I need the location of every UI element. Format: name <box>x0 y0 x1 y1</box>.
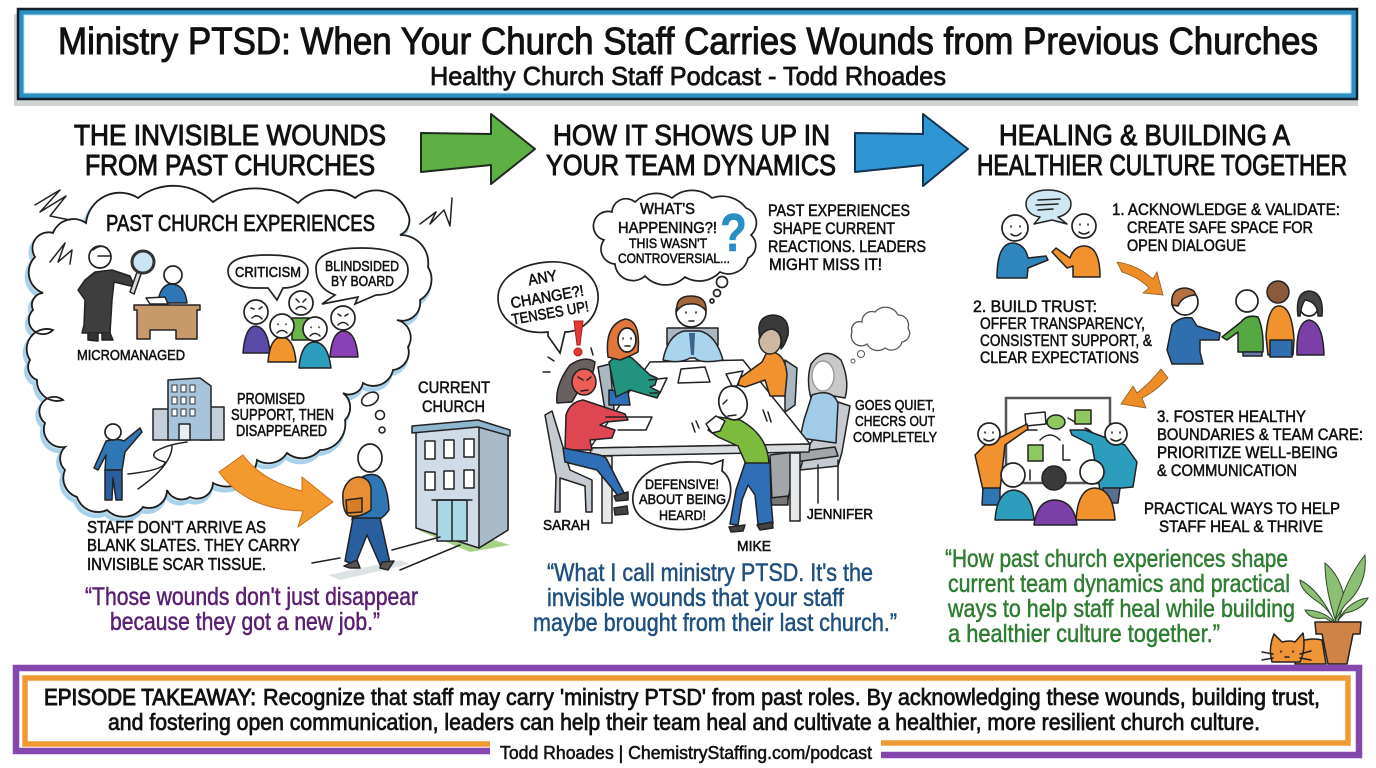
speech bubble: any change <box>498 262 598 353</box>
arrow: blue <box>855 114 968 186</box>
label: goes quiet: GOES QUIET, <box>855 398 935 414</box>
title banner <box>14 9 1358 106</box>
label: promised support: DISAPPEARED <box>236 423 327 440</box>
text block: practical ways: PRACTICAL WAYS TO HELP <box>1144 499 1340 518</box>
text block: past experiences: PAST EXPERIENCES <box>768 202 910 220</box>
heading: team dynamics <box>546 120 836 182</box>
heading: team dynamics: HOW IT SHOWS UP IN <box>553 120 830 152</box>
quote: blue: “What I call ministry PTSD. It's the <box>547 559 873 587</box>
label: goes quiet: COMPLETELY <box>853 430 937 446</box>
panel: episode takeaway: Recognize that staff may carry 'ministry PTSD' from past roles. By acknowledging these wounds, building trust, <box>263 684 1320 710</box>
subtitle: Healthy Church Staff Podcast - Todd Rhoades <box>430 61 946 91</box>
icon: red exclamation <box>574 321 583 356</box>
panel: past church experiences cloud <box>25 186 452 521</box>
text block: practical ways <box>1144 499 1340 536</box>
label: jennifer: JENNIFER <box>807 507 873 523</box>
icon: office building <box>128 378 224 489</box>
panel: episode takeaway <box>16 668 1359 763</box>
heading: invisible wounds <box>74 120 386 182</box>
icon: orange cat <box>1262 633 1326 664</box>
arrow: orange to current church <box>219 455 333 527</box>
question mark: ? <box>720 203 747 263</box>
heading: invisible wounds: THE INVISIBLE WOUNDS <box>74 120 386 152</box>
icon: priest micromanaging with magnifier <box>78 246 154 341</box>
man in orange <box>726 315 797 412</box>
thought trail circles <box>359 389 385 433</box>
icon: person walking with backpack <box>328 444 410 580</box>
frame <box>16 668 1359 755</box>
text block: staff scar tissue: STAFF DON'T ARRIVE AS <box>87 517 266 537</box>
icon: handshake group <box>1167 281 1324 364</box>
quote: green <box>945 545 1295 648</box>
text block: staff scar tissue: BLANK SLATES. THEY CARRY <box>87 535 300 555</box>
speech bubble: any change: ANY <box>527 268 558 289</box>
heading: team dynamics: YOUR TEAM DYNAMICS <box>546 150 836 182</box>
text block: step 1: CREATE SAFE SPACE FOR <box>1127 218 1313 237</box>
speech bubble: criticism: CRITICISM <box>235 264 301 281</box>
label: current church: CHURCH <box>422 397 485 416</box>
text block: staff scar tissue <box>87 517 300 574</box>
speech bubble: defensive: DEFENSIVE! <box>645 476 719 492</box>
thought cloud: what's happening: CONTROVERSIAL... <box>618 251 730 266</box>
speech bubble: any change: TENSES UP! <box>510 298 590 329</box>
footer credit: Todd Rhoades | ChemistryStaffing.com/podcast <box>500 743 872 763</box>
text block: past experiences: REACTIONS. LEADERS <box>768 238 926 256</box>
quote: green: current team dynamics and practical <box>948 570 1290 598</box>
arrow: green <box>421 114 535 184</box>
label: current church: CURRENT <box>418 378 490 397</box>
heading: invisible wounds: FROM PAST CHURCHES <box>85 150 375 182</box>
text block: step 3: & COMMUNICATION <box>1157 461 1297 480</box>
quote: green: “How past church experiences shape <box>945 545 1288 573</box>
icon: current church building <box>312 420 510 570</box>
quote: purple <box>85 583 418 636</box>
text block: step 2: 2. BUILD TRUST: <box>973 297 1097 316</box>
label: goes quiet <box>853 398 937 446</box>
text block: staff scar tissue: INVISIBLE SCAR TISSUE. <box>87 554 266 574</box>
heading: healing: HEALING & BUILDING A <box>999 120 1291 152</box>
text block: past experiences: MIGHT MISS IT! <box>769 256 882 274</box>
quote: purple: because they got a new job.” <box>110 608 380 636</box>
thought cloud: what's happening: WHAT'S <box>640 201 695 218</box>
quote: blue: invisible wounds that your staff <box>547 584 844 612</box>
label: goes quiet: CHECRS OUT <box>855 414 935 430</box>
speech bubble: defensive <box>633 460 731 530</box>
thought cloud: what's happening: THIS WASN'T <box>629 236 707 251</box>
thought cloud: empty <box>851 307 910 363</box>
quote: green: a healthier culture together.” <box>948 620 1220 648</box>
mike defensive <box>692 383 773 532</box>
label: micromanaged: MICROMANAGED <box>77 347 185 364</box>
icon: upset group <box>243 291 358 368</box>
thought cloud outline <box>25 186 452 521</box>
label: promised support: PROMISED <box>237 391 305 408</box>
jennifer goes quiet <box>770 353 850 505</box>
text block: step 2: OFFER TRANSPARENCY, <box>980 314 1145 333</box>
leader <box>663 296 723 362</box>
speech bubble: blindsided by board: BLINDSIDED <box>325 258 399 275</box>
illustration: meeting table scene <box>543 296 910 532</box>
speech bubble: blindsided by board: BY BOARD <box>331 273 394 290</box>
quote: purple: “Those wounds don't just disappear <box>85 583 418 611</box>
icon: whiteboard team <box>975 398 1137 525</box>
thought cloud: what's happening: HAPPENING?! <box>618 220 717 237</box>
heading: past church experiences: PAST CHURCH EXPERIENCES <box>106 210 375 236</box>
speech bubble: defensive: ABOUT BEING <box>639 491 726 507</box>
speech bubble: defensive: HEARD! <box>659 507 706 523</box>
text block: step 3 <box>1157 407 1363 480</box>
thought cloud: what's happening <box>593 190 756 303</box>
text block: step 1: 1. ACKNOWLEDGE & VALIDATE: <box>1112 200 1340 219</box>
text block: step 1: OPEN DIALOGUE <box>1127 236 1246 255</box>
label: current church <box>418 378 490 416</box>
text block: step 2: CONSISTENT SUPPORT, & <box>980 331 1153 350</box>
icon: potted plant <box>1300 555 1368 664</box>
icon: desk and seated staff <box>134 266 200 339</box>
label: promised support <box>231 391 334 440</box>
quote: blue <box>533 559 897 637</box>
sarah tense <box>543 348 652 515</box>
text block: practical ways: STAFF HEAL & THRIVE <box>1159 517 1323 536</box>
icon: person reaching toward building <box>94 424 142 500</box>
speech bubble: blindsided by board <box>316 248 408 304</box>
quote: blue: maybe brought from their last church.” <box>533 609 897 637</box>
text block: step 2: CLEAR EXPECTATIONS <box>980 348 1139 367</box>
label: sarah: SARAH <box>543 518 590 534</box>
text block: past experiences <box>768 202 926 274</box>
arrow: orange step 1 to 2 <box>1117 262 1163 295</box>
speech bubble: any change: CHANGE?! <box>509 283 585 312</box>
label: mike: MIKE <box>737 539 771 555</box>
arrow: orange step 2 to 3 <box>1121 369 1168 408</box>
table <box>590 360 810 523</box>
takeaway text: EPISODE TAKEAWAY: <box>44 684 256 710</box>
text block: step 3: PRIORITIZE WELL-BEING <box>1157 443 1338 462</box>
label: promised support: SUPPORT, THEN <box>231 407 334 424</box>
speech bubble: criticism <box>228 255 308 300</box>
quote: green: ways to help staff heal while building <box>947 595 1295 623</box>
text block: step 3: 3. FOSTER HEALTHY <box>1157 407 1306 426</box>
heading: healing <box>977 120 1347 182</box>
text block: step 1 <box>1112 200 1340 255</box>
panel: episode takeaway: and fostering open communication, leaders can help their team heal and cultivate a healthier, more resilient church culture. <box>108 709 1260 735</box>
text block: past experiences: SHAPE CURRENT <box>773 220 895 238</box>
icon: two people talking <box>997 190 1100 278</box>
woman with red hair <box>598 319 667 410</box>
text block: step 2 <box>973 297 1153 367</box>
